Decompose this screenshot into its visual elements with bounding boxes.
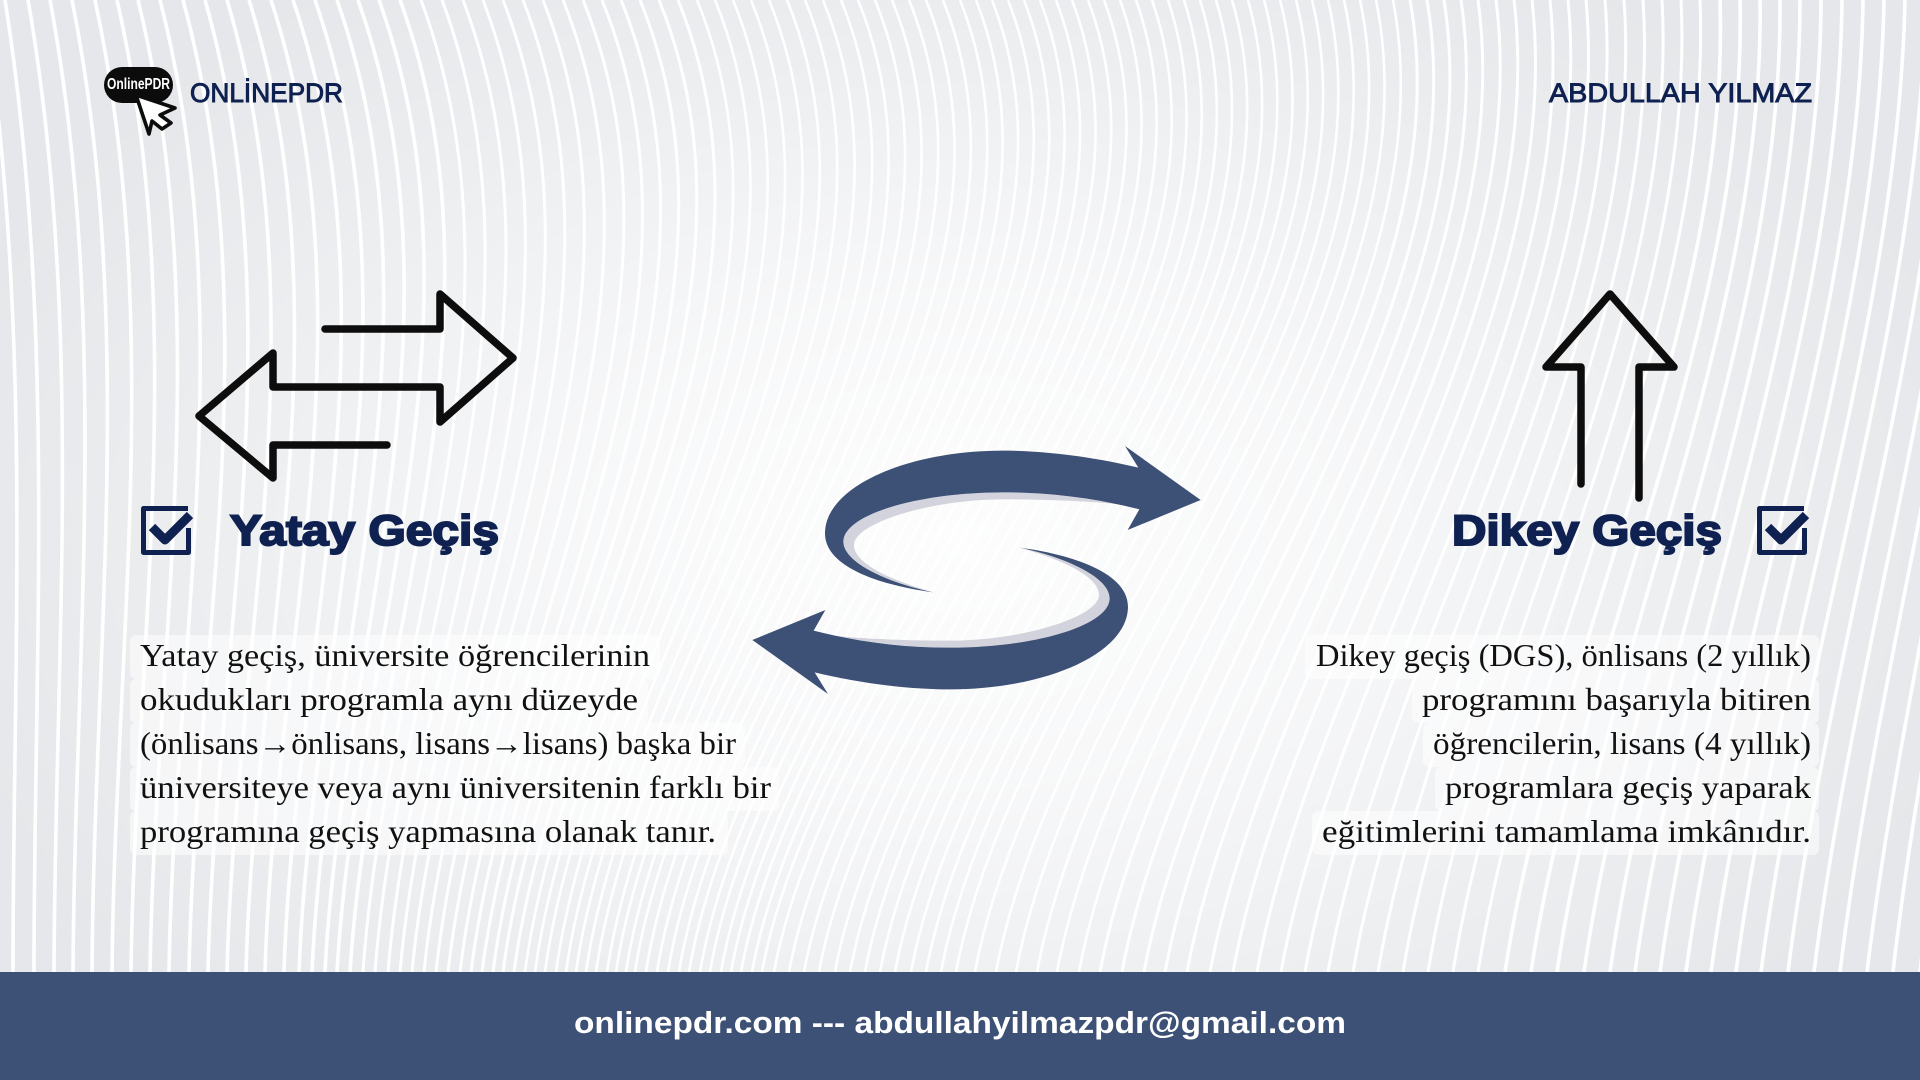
- text block: Yatay Geçiş description: (önlisans→önlisans, lisans→lisans) başka bir: [140, 726, 737, 761]
- panel: Dikey Geçiş: [1305, 294, 1819, 855]
- text block: Yatay Geçiş description: okudukları programla aynı düzeyde: [140, 682, 638, 717]
- text block: Yatay Geçiş description: Yatay geçiş, üniversite öğrencilerinin: [140, 638, 650, 673]
- panel: Yatay Geçiş: [130, 294, 779, 855]
- text block: Dikey Geçiş description: Dikey geçiş (DGS), önlisans (2 yıllık): [1316, 638, 1811, 673]
- logo: OnlinePDR badge with cursor: [104, 67, 175, 134]
- heading: Dikey Geçiş: Dikey Geçiş: [1452, 507, 1722, 555]
- author name: ABDULLAH YILMAZ: [1549, 78, 1812, 108]
- brand name: ONLİNEPDR: [190, 78, 343, 108]
- footer bar with contact details: onlinepdr.com --- abdullahyilmazpdr@gmail.com: [574, 1005, 1346, 1040]
- icon: checkbox left: [144, 508, 190, 552]
- logo: OnlinePDR badge with cursor: OnlinePDR: [107, 76, 170, 93]
- icon: checkbox right: [1760, 508, 1806, 552]
- heading: Yatay Geçiş: Yatay Geçiş: [230, 507, 499, 555]
- icon: central S-shaped swap arrows: [752, 446, 1201, 694]
- text block: Dikey Geçiş description: programını başarıyla bitiren: [1422, 682, 1811, 717]
- icon: up arrow: [1546, 294, 1674, 498]
- text block: Yatay Geçiş description: programına geçiş yapmasına olanak tanır.: [140, 814, 716, 849]
- text block: Yatay Geçiş description: üniversiteye veya aynı üniversitenin farklı bir: [140, 770, 772, 805]
- text block: Yatay Geçiş description: [130, 635, 779, 855]
- text block: Dikey Geçiş description: programlara geçiş yaparak: [1445, 770, 1811, 805]
- text block: Dikey Geçiş description: [1305, 635, 1819, 855]
- icon: horizontal double arrows: [199, 294, 513, 478]
- text block: Dikey Geçiş description: öğrencilerin, lisans (4 yıllık): [1433, 726, 1811, 761]
- text block: Dikey Geçiş description: eğitimlerini tamamlama imkânıdır.: [1322, 814, 1811, 849]
- footer bar with contact details: [0, 972, 1920, 1080]
